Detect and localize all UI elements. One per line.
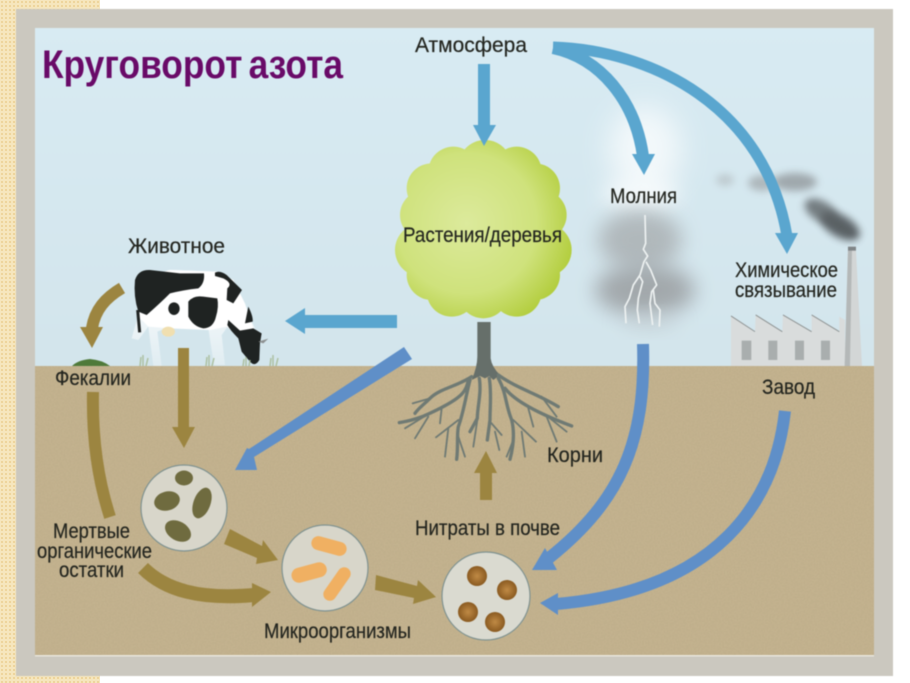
label: dead organic remains: органические bbox=[37, 540, 152, 563]
label: dead organic remains bbox=[37, 520, 152, 582]
factory smoke bbox=[716, 173, 865, 247]
title: Круговорот азота bbox=[42, 43, 344, 87]
illustration: trunk and roots bbox=[399, 322, 572, 459]
arrow: plants to decomposers bbox=[235, 347, 412, 470]
label: microorganisms: Микроорганизмы bbox=[264, 620, 411, 643]
label: plants and trees: Растения/деревья bbox=[403, 224, 562, 247]
circle: soil nitrates bbox=[442, 552, 530, 640]
arrow: atmosphere to plants bbox=[473, 64, 496, 146]
label: lightning: Молния bbox=[610, 185, 677, 208]
label: feces: Фекалии bbox=[55, 367, 131, 390]
circle: microorganisms bbox=[282, 525, 368, 611]
arrow: plants to animal bbox=[285, 308, 397, 334]
arrow: microorganisms to nitrates bbox=[375, 575, 436, 604]
arrow: atmosphere to lightning bbox=[553, 48, 655, 175]
decorative cream strip bbox=[0, 0, 100, 683]
arrow: animal to feces bbox=[80, 288, 122, 348]
arrow: animal to dead matter circle bbox=[172, 348, 195, 448]
label: animal: Животное bbox=[128, 235, 225, 258]
circle: dead organic matter bbox=[141, 465, 227, 551]
factory bbox=[731, 247, 862, 366]
sky bbox=[35, 28, 874, 367]
label: dead organic remains: остатки bbox=[59, 559, 124, 582]
arrow: dead matter to microorganisms bbox=[224, 529, 278, 564]
arrow: factory to soil nitrates bbox=[540, 411, 785, 615]
arrow: nitrates to roots bbox=[474, 451, 497, 500]
arrow: atmosphere to chemical fixation bbox=[553, 47, 798, 254]
arrow: feces to dead remains bbox=[93, 392, 110, 517]
arrow: lightning to soil nitrates bbox=[532, 344, 643, 570]
label: factory: Завод bbox=[762, 376, 815, 399]
illustration: cow bbox=[132, 270, 268, 366]
illustration: tree crown bbox=[395, 140, 572, 318]
feces mound bbox=[72, 359, 110, 366]
label: chemical fixation: Химическое bbox=[735, 259, 838, 282]
icon: lightning bolt bbox=[625, 215, 660, 327]
label: chemical fixation: связывание bbox=[735, 279, 837, 302]
arrow: dead remains to microorganisms bbox=[143, 568, 271, 607]
label: roots: Корни bbox=[547, 444, 603, 467]
label: chemical fixation bbox=[735, 259, 838, 302]
storm cloud with lightning bbox=[595, 106, 695, 330]
label: dead organic remains: Мертвые bbox=[53, 520, 130, 543]
grass tufts bbox=[140, 355, 278, 366]
label: atmosphere: Атмосфера bbox=[415, 34, 527, 57]
soil bbox=[35, 366, 874, 656]
label: nitrates in soil: Нитраты в почве bbox=[415, 517, 560, 540]
